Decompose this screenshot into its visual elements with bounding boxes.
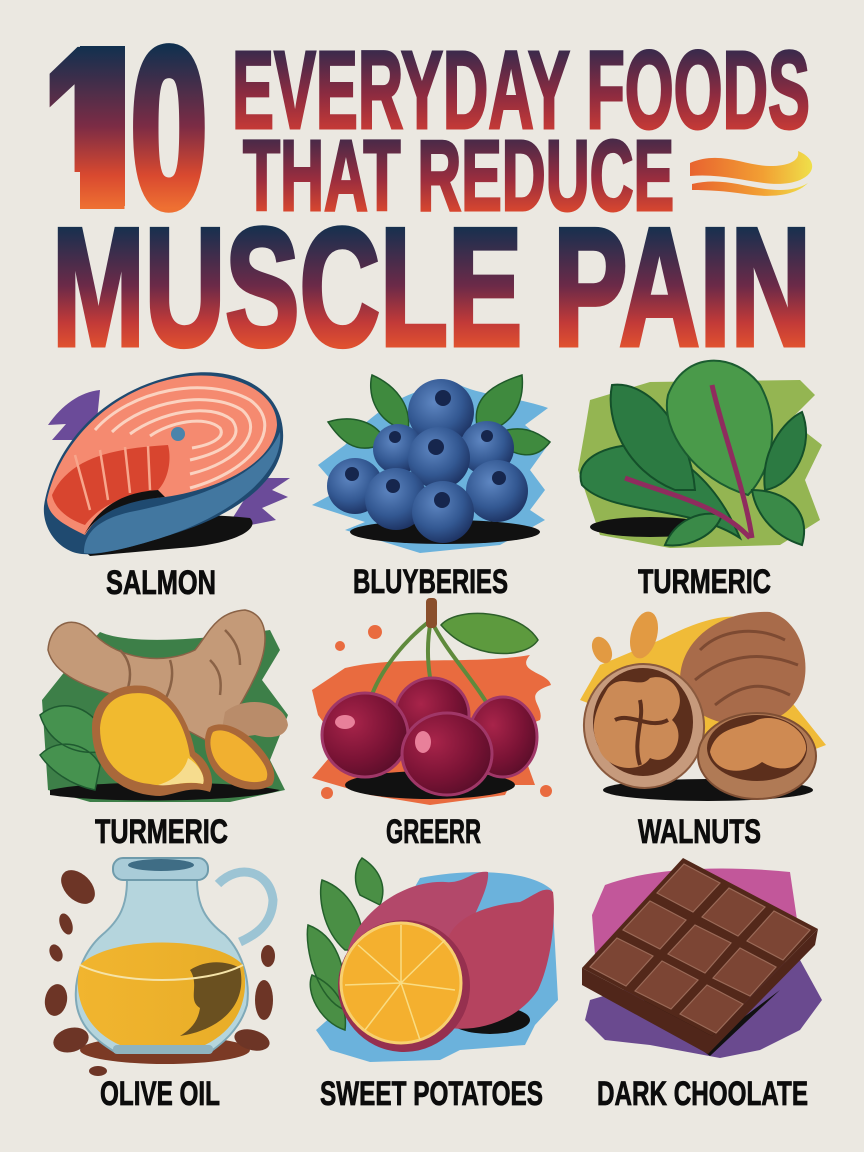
panel: salmon xyxy=(44,372,290,602)
illustration: blueberries xyxy=(312,375,550,553)
illustration: dark chocolate bar xyxy=(582,858,822,1058)
illustration: salmon steak xyxy=(44,372,290,556)
panel: olive oil xyxy=(42,858,275,1113)
label: greerr: GREERR xyxy=(386,813,481,851)
illustration: cherries xyxy=(312,598,552,805)
panel: sweet potatoes xyxy=(307,858,558,1113)
label: walnuts: WALNUTS xyxy=(638,813,761,851)
panel: dark chocolate xyxy=(582,858,822,1113)
panel: spinach xyxy=(578,361,822,601)
panel: cherries xyxy=(312,598,552,851)
label: sweet potatoes: SWEET POTATOES xyxy=(320,1075,543,1113)
label: olive oil: OLIVE OIL xyxy=(100,1075,220,1113)
panel: blueberries xyxy=(312,375,550,601)
illustration: spinach leaves xyxy=(578,361,822,548)
label: bluyberies: BLUYBERIES xyxy=(353,563,508,601)
illustration: olive oil jug xyxy=(42,858,275,1076)
label: turmeric: TURMERIC xyxy=(95,813,228,851)
illustration: walnuts xyxy=(574,608,826,801)
title number 10: 1 xyxy=(42,3,126,253)
panel: turmeric root xyxy=(40,610,288,851)
panel: walnuts xyxy=(574,608,826,851)
icon: heat swoosh xyxy=(690,151,812,196)
label: salmon: SALMON xyxy=(106,564,216,602)
title xyxy=(36,3,812,381)
illustration: sweet potatoes xyxy=(307,858,558,1067)
label: turmeric: TURMERIC xyxy=(638,563,771,601)
illustration: turmeric root and slices xyxy=(40,610,288,802)
title number 10: 0 xyxy=(131,3,207,253)
